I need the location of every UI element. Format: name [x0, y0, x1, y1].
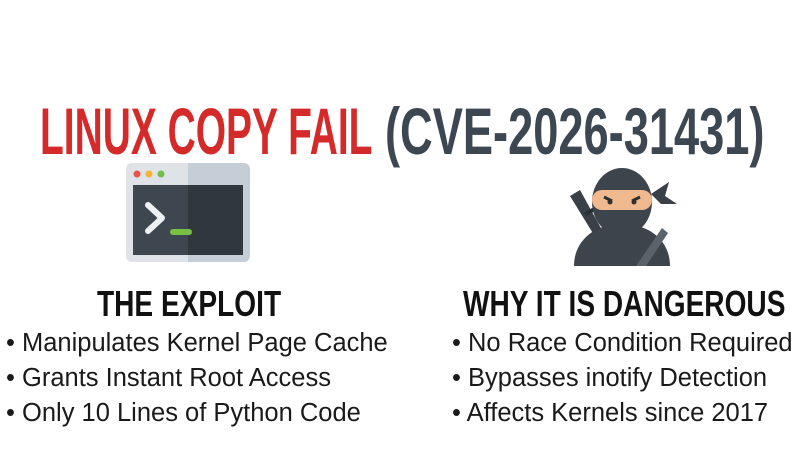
icon: terminal	[126, 163, 250, 262]
title: LINUX COPY FAIL	[40, 94, 372, 168]
heading: the exploit: THE EXPLOIT	[97, 283, 281, 324]
icon: ninja	[570, 168, 677, 266]
list: exploit bullets	[6, 329, 388, 427]
title: (CVE-2026-31431)	[385, 94, 764, 168]
list: danger bullets: • Bypasses inotify Detection	[452, 364, 767, 392]
heading: why it is dangerous: WHY IT IS DANGEROUS	[463, 283, 785, 324]
list: danger bullets: • No Race Condition Required	[452, 329, 793, 357]
list: danger bullets: • Affects Kernels since 2017	[452, 399, 768, 427]
list: danger bullets	[452, 329, 793, 427]
title	[40, 94, 764, 168]
list: exploit bullets: • Only 10 Lines of Python Code	[6, 399, 361, 427]
list: exploit bullets: • Manipulates Kernel Page Cache	[6, 329, 388, 357]
list: exploit bullets: • Grants Instant Root Access	[6, 364, 331, 392]
